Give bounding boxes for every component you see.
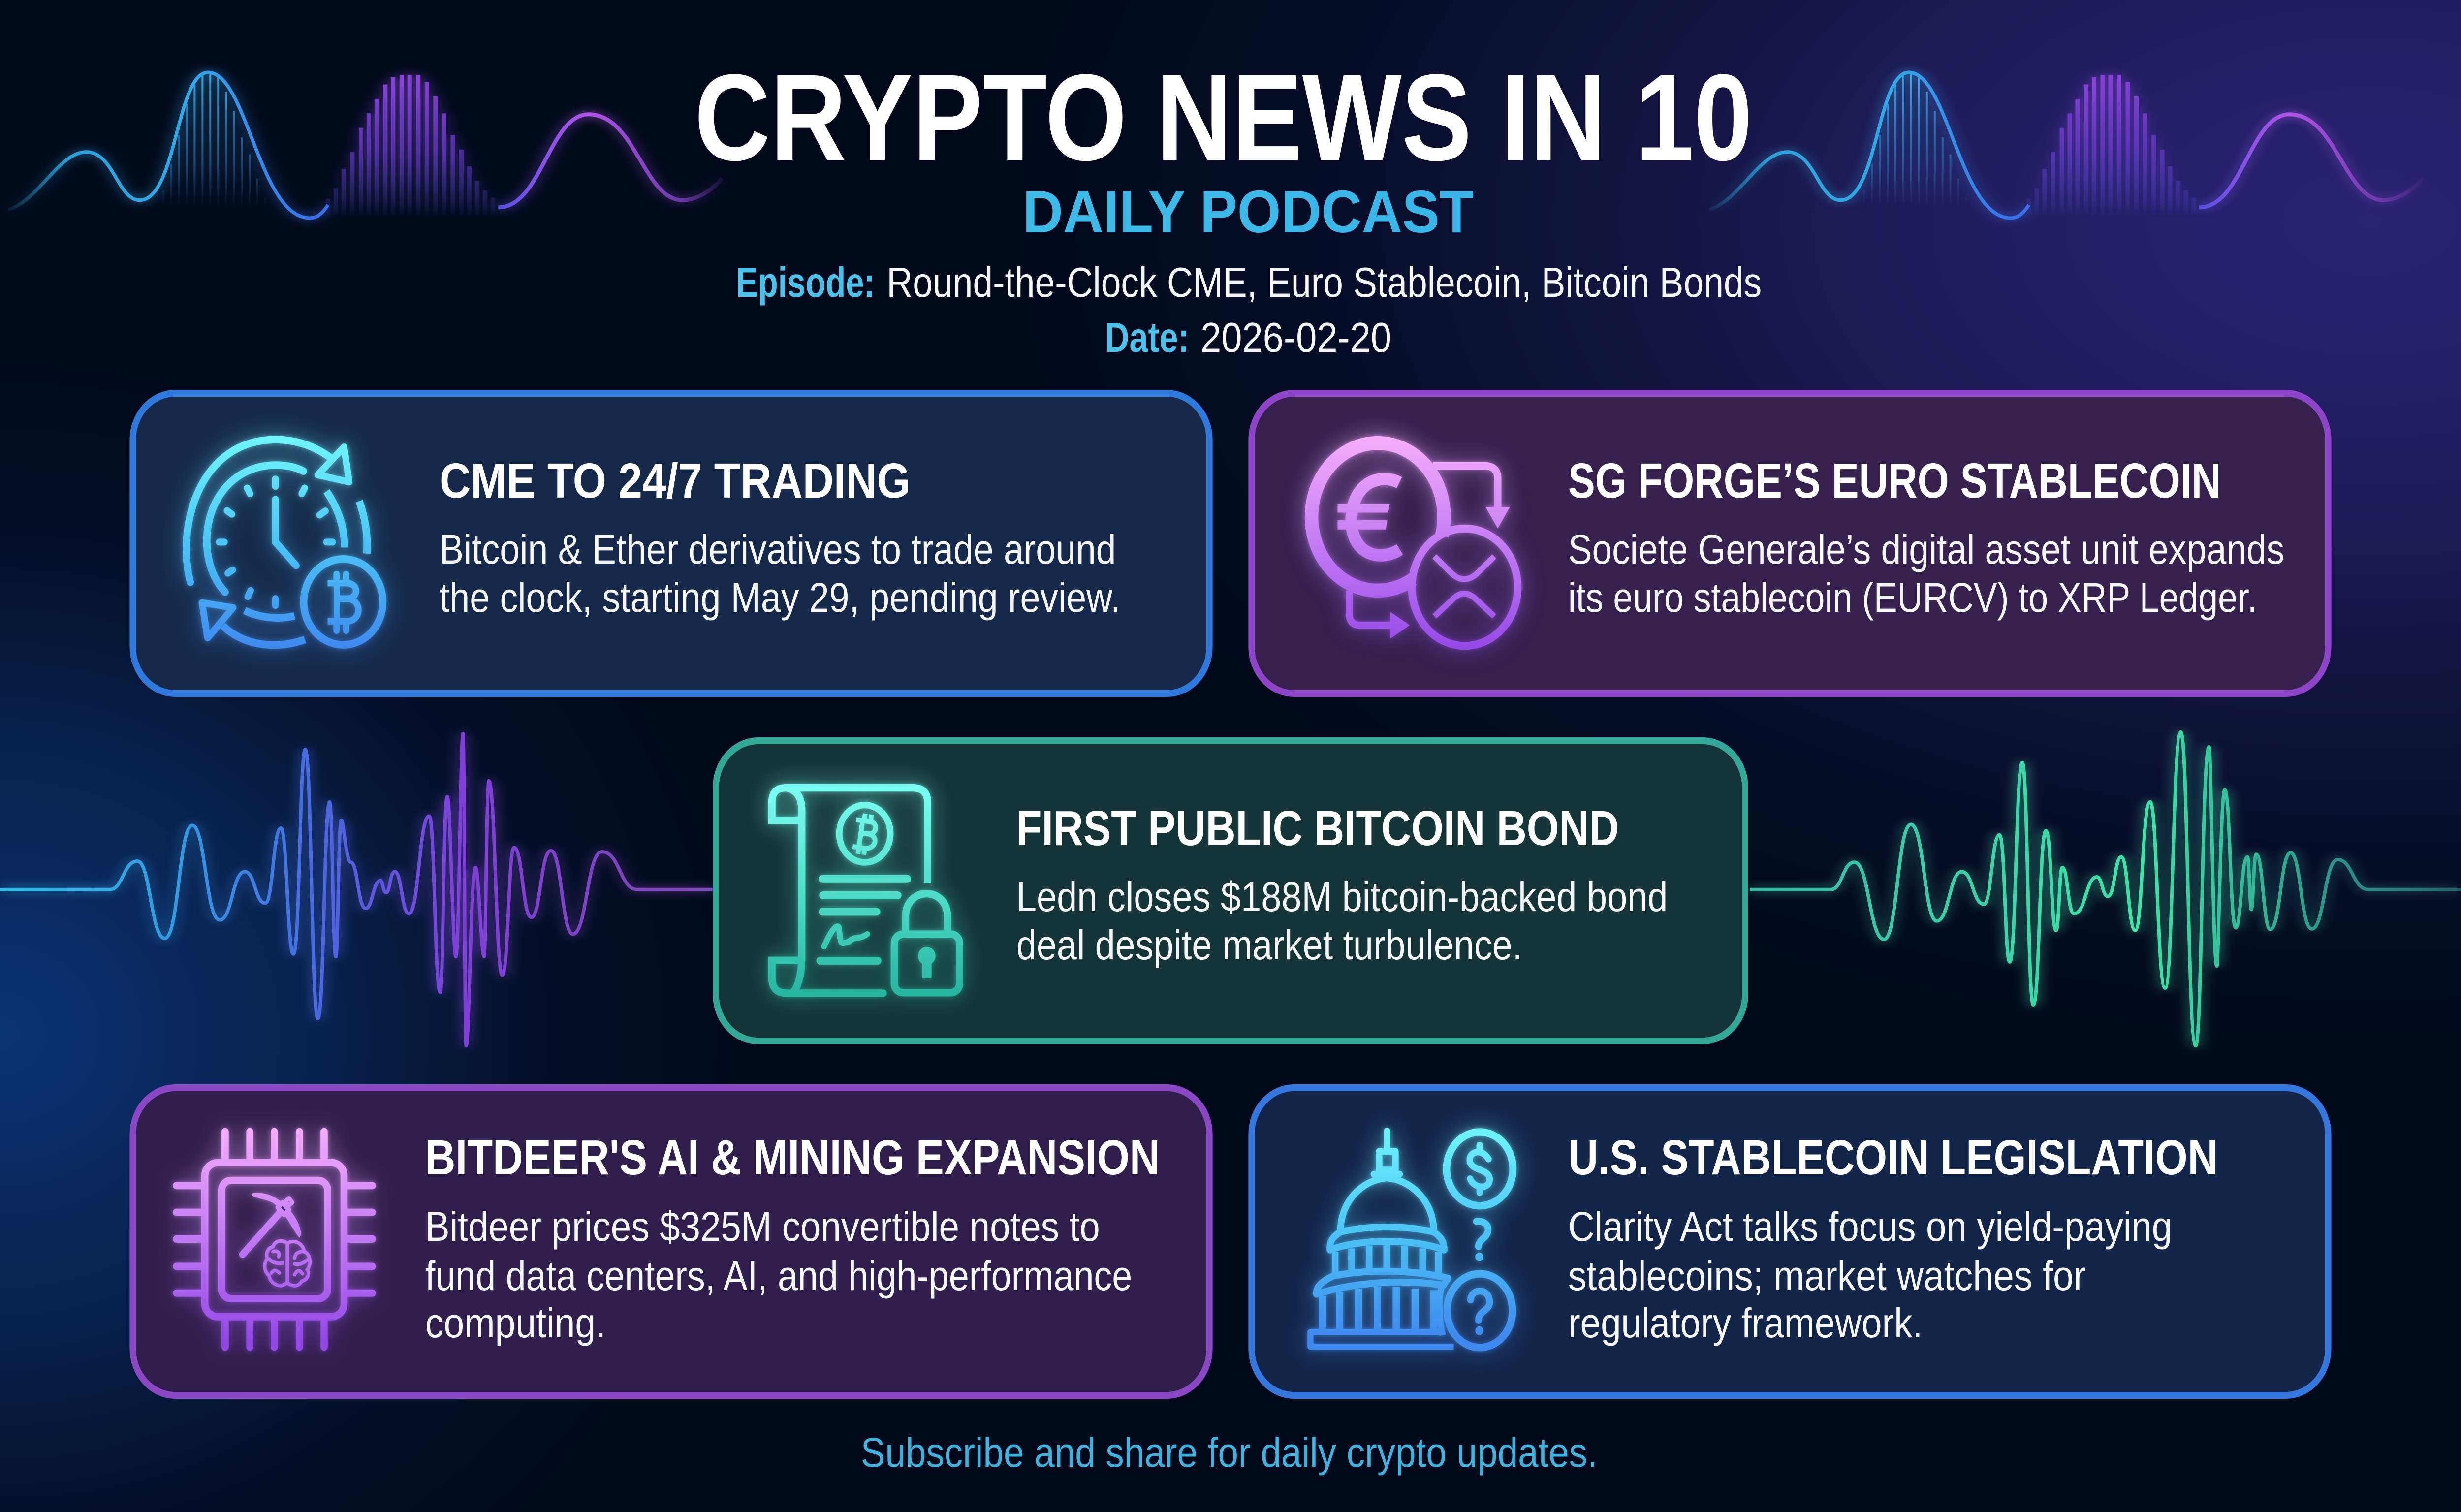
description: fund data centers, AI, and high-performance bbox=[425, 1253, 1132, 1299]
subtitle: DAILY PODCAST bbox=[1023, 178, 1474, 245]
description bbox=[440, 527, 1121, 621]
description: computing. bbox=[425, 1300, 606, 1347]
description bbox=[1016, 874, 1668, 969]
description: regulatory framework. bbox=[1568, 1300, 1923, 1347]
date line: 2026-02-20 bbox=[1200, 315, 1391, 361]
description: Societe Generale’s digital asset unit expands bbox=[1568, 527, 2284, 573]
description: Clarity Act talks focus on yield-paying bbox=[1568, 1204, 2172, 1250]
description bbox=[1568, 527, 2284, 621]
audio wave: top left bbox=[8, 72, 722, 218]
description: the clock, starting May 29, pending review. bbox=[440, 575, 1121, 621]
icon: euro to XRP bbox=[1312, 443, 1518, 646]
description bbox=[1568, 1204, 2172, 1347]
footer call to action: Subscribe and share for daily crypto updates. bbox=[861, 1430, 1598, 1476]
date line bbox=[1105, 315, 1391, 361]
icon: clock with bitcoin bbox=[187, 440, 383, 645]
description: Bitcoin & Ether derivatives to trade around bbox=[440, 527, 1116, 573]
audio wave: middle right green bbox=[1750, 732, 2458, 1046]
panel: U.S. stablecoin legislation bbox=[1252, 1088, 2328, 1395]
panel: Bitdeer AI and mining bbox=[133, 1088, 1209, 1395]
description: its euro stablecoin (EURCV) to XRP Ledger. bbox=[1568, 575, 2257, 621]
heading: CME TO 24/7 TRADING bbox=[440, 454, 911, 508]
panel: first public bitcoin bond bbox=[716, 741, 1745, 1041]
heading: BITDEER'S AI & MINING EXPANSION bbox=[425, 1131, 1160, 1185]
icon: bond scroll with lock bbox=[772, 788, 959, 993]
description: Ledn closes $188M bitcoin-backed bond bbox=[1016, 874, 1668, 920]
description: deal despite market turbulence. bbox=[1016, 922, 1522, 969]
audio wave: middle left blue to purple bbox=[3, 734, 713, 1046]
description bbox=[425, 1204, 1132, 1347]
audio wave: top right bbox=[1709, 72, 2423, 218]
icon: chip with pickaxe and brain bbox=[176, 1132, 372, 1347]
heading: SG FORGE’S EURO STABLECOIN bbox=[1568, 454, 2221, 508]
description: stablecoins; market watches for bbox=[1568, 1253, 2086, 1299]
heading: U.S. STABLECOIN LEGISLATION bbox=[1568, 1131, 2218, 1185]
panel: SG Forge euro stablecoin bbox=[1252, 393, 2328, 693]
episode line: Episode: bbox=[736, 259, 875, 306]
panel: CME to 24/7 trading bbox=[133, 393, 1209, 693]
icon: capitol with dollar and question marks bbox=[1310, 1131, 1513, 1348]
title: CRYPTO NEWS IN 10 bbox=[694, 49, 1752, 186]
description: Bitdeer prices $325M convertible notes to bbox=[425, 1204, 1100, 1250]
date line: Date: bbox=[1105, 315, 1189, 361]
episode line: Round-the-Clock CME, Euro Stablecoin, Bitcoin Bonds bbox=[886, 259, 1762, 306]
heading: FIRST PUBLIC BITCOIN BOND bbox=[1016, 801, 1619, 856]
